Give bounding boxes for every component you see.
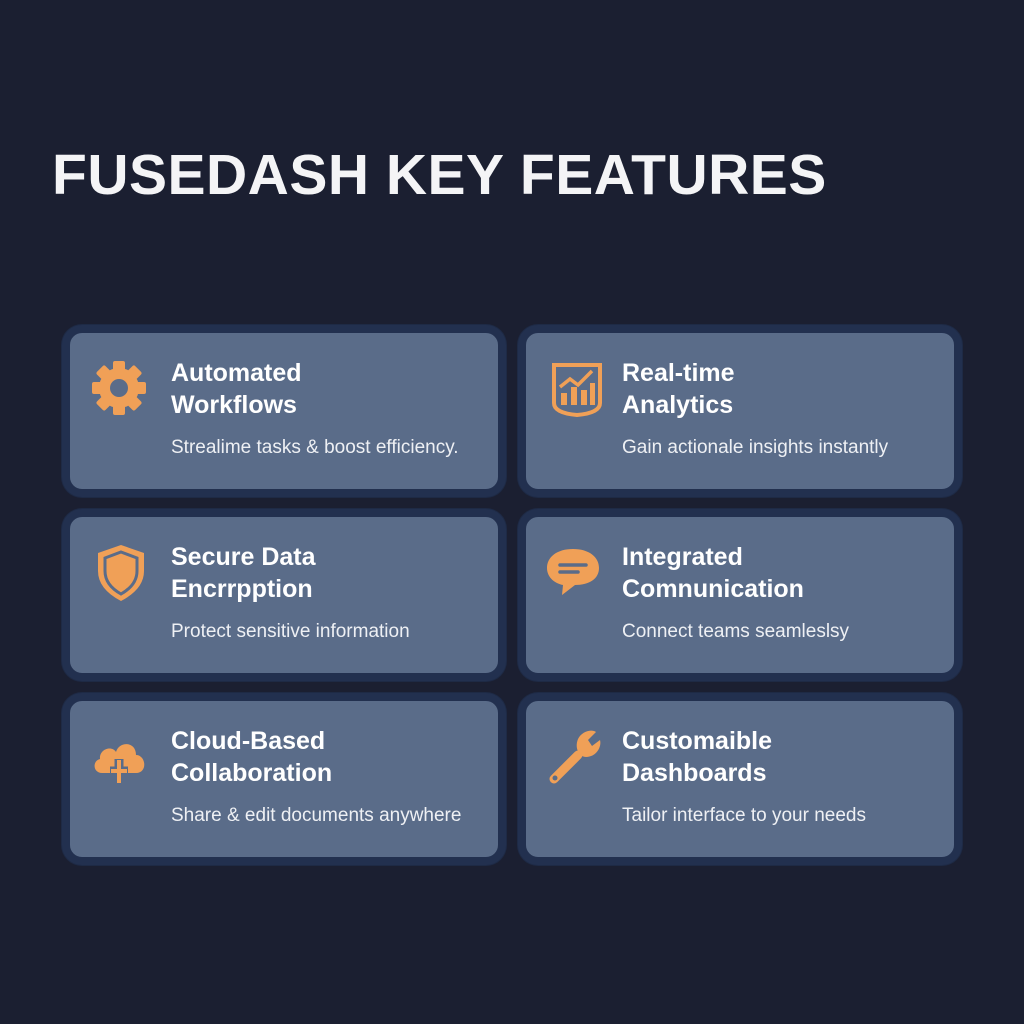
- heading: Dashboards: [622, 759, 766, 787]
- heading: Automated: [171, 359, 302, 387]
- title: FUSEDASH KEY FEATURES: [52, 143, 827, 207]
- panel: real-time analytics: [518, 325, 962, 497]
- icon: cloud plus: [94, 744, 144, 783]
- icon: shield: [98, 545, 144, 601]
- icon: chat bubble: [547, 549, 599, 595]
- heading: Comnunication: [622, 575, 804, 603]
- heading: [171, 727, 332, 787]
- icon: chart: [552, 363, 602, 417]
- description: Tailor interface to your needs: [622, 805, 866, 826]
- heading: Collaboration: [171, 759, 332, 787]
- panel: cloud-based collaboration: [62, 693, 506, 865]
- panel: integrated communication: [518, 509, 962, 681]
- heading: Analytics: [622, 391, 733, 419]
- heading: Encrrpption: [171, 575, 313, 603]
- heading: [171, 543, 316, 603]
- heading: [622, 359, 735, 419]
- heading: [171, 359, 302, 419]
- description: Gain actionale insights instantly: [622, 437, 888, 458]
- icon: wrench: [550, 730, 600, 784]
- heading: Secure Data: [171, 543, 316, 571]
- panel: secure data encryption: [62, 509, 506, 681]
- heading: Customaible: [622, 727, 772, 755]
- heading: Real-time: [622, 359, 735, 387]
- icon: gear: [92, 361, 146, 415]
- heading: Workflows: [171, 391, 297, 419]
- heading: [622, 727, 772, 787]
- description: Connect teams seamleslsy: [622, 621, 849, 642]
- description: Protect sensitive information: [171, 621, 410, 642]
- description: Share & edit documents anywhere: [171, 805, 461, 826]
- heading: Cloud-Based: [171, 727, 325, 755]
- panel: automated workflows: [62, 325, 506, 497]
- heading: Integrated: [622, 543, 743, 571]
- panel: customizable dashboards: [518, 693, 962, 865]
- heading: [622, 543, 804, 603]
- description: Strealime tasks & boost efficiency.: [171, 437, 459, 458]
